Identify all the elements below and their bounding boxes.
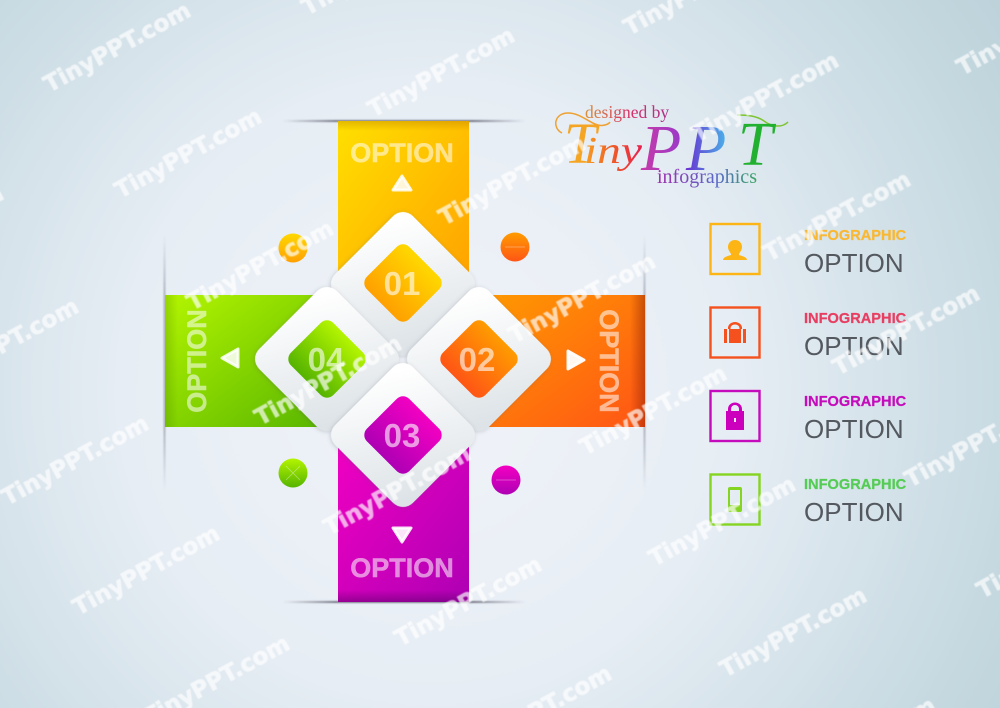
logo: T [738,111,777,179]
legend item 4: INFOGRAPHIC [804,477,907,493]
watermarks: TinyPPT.com [391,552,546,652]
tile 01 [325,206,481,362]
watermarks: TinyPPT.com [0,411,153,511]
icon: lock [726,403,744,430]
dot: yellow [278,234,308,262]
panel: right orange band [470,295,645,427]
legend item 1 [710,224,907,278]
watermarks: TinyPPT.com [688,48,843,148]
watermarks: TinyPPT.com [40,0,195,98]
watermarks: TinyPPT.com [364,23,519,123]
label: right option: OPTION [594,309,624,413]
tile 03: 03 [384,417,420,454]
logo: iny [584,130,642,172]
tile 04 [249,281,405,437]
label: left option: OPTION [182,309,212,413]
tile 02: 02 [459,341,495,378]
watermarks: TinyPPT.com [829,281,984,381]
icon: person [723,240,747,260]
legend item 4: OPTION [804,497,904,527]
watermarks: TinyPPT.com [576,361,731,461]
watermarks: TinyPPT.com [505,249,660,349]
dot: green cross [278,458,308,488]
legend item 2 [710,308,907,361]
icon: phone [728,487,742,512]
tile 04: 04 [308,341,345,378]
label: top option: OPTION [350,138,454,168]
watermarks: TinyPPT.com [320,441,475,541]
legend item 3 [710,391,907,444]
legend item 3: OPTION [804,414,904,444]
legend item 2: INFOGRAPHIC [804,311,907,327]
panel: left green band [165,295,335,427]
logo: P [640,112,681,185]
legend item 2: OPTION [804,331,904,361]
tile 03 [325,357,481,513]
watermarks: TinyPPT.com [183,216,338,316]
watermarks: TinyPPT.com [645,472,800,572]
watermarks: TinyPPT.com [760,167,915,267]
watermarks: TinyPPT.com [435,131,590,231]
dot: orange minus [500,232,530,262]
legend item 1: OPTION [804,248,904,278]
panel: top yellow band [338,121,469,291]
watermarks: TinyPPT.com [716,583,871,683]
logo: P [685,112,726,185]
logo: T [564,111,600,176]
watermarks: TinyPPT.com [251,331,406,431]
legend item 3: INFOGRAPHIC [804,394,907,410]
legend item 4 [710,474,907,527]
logo: infographics [657,166,757,188]
logo [556,102,788,188]
arrow: left [222,349,238,367]
label: bottom option: OPTION [350,553,454,583]
arrow: up [393,176,411,190]
logo: designed by [585,102,669,122]
tile 01: 01 [384,265,420,302]
legend item 1: INFOGRAPHIC [804,228,907,244]
icon: bag [724,322,746,343]
watermarks: TinyPPT.com [69,521,224,621]
arrow: right [568,351,584,369]
dot: magenta minus [492,466,520,494]
panel: bottom magenta band [338,430,469,602]
watermarks: TinyPPT.com [111,104,266,204]
arrow: down [393,528,411,542]
slit shadows [164,120,646,603]
tile 02 [401,281,557,437]
